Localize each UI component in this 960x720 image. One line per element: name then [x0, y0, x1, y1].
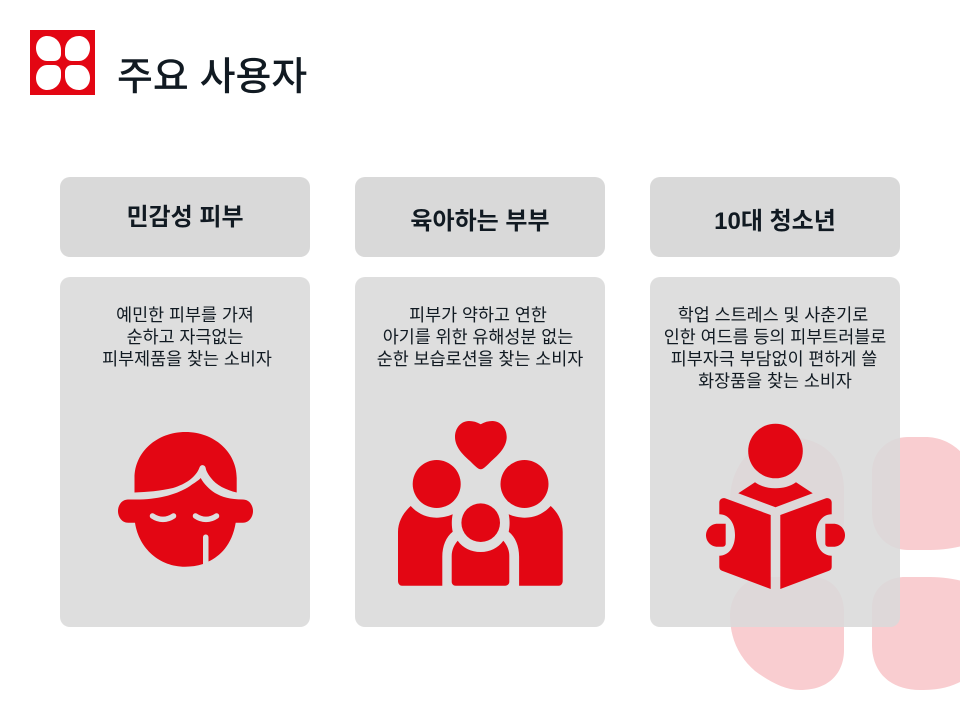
title: 주요 사용자 [117, 56, 307, 99]
panel header: 10대 청소년 [650, 177, 900, 257]
logo [30, 30, 95, 95]
panel: 10대 청소년 description [650, 277, 900, 627]
panel header: 민감성 피부: 민감성 피부 [126, 204, 244, 231]
panel: 육아하는 부부 description: 순한 보습로션을 찾는 소비자 [377, 349, 583, 369]
panel header: 육아하는 부부 [355, 177, 605, 257]
panel: 민감성 피부 description: 피부제품을 찾는 소비자 [102, 349, 272, 369]
panel: 10대 청소년 description: 화장품을 찾는 소비자 [698, 371, 852, 391]
panel header: 10대 청소년: 10대 청소년 [714, 208, 836, 235]
panel: 민감성 피부 description: 예민한 피부를 가져 [116, 305, 254, 325]
panel header: 육아하는 부부: 육아하는 부부 [410, 208, 550, 235]
panel: 10대 청소년 description: 인한 여드름 등의 피부트러블로 [664, 327, 886, 347]
panel: 민감성 피부 description: 순하고 자극없는 [127, 327, 243, 347]
panel: 육아하는 부부 description: 아기를 위한 유해성분 없는 [383, 327, 573, 347]
panel: 10대 청소년 description: 피부자극 부담없이 편하게 쓸 [671, 349, 877, 369]
panel: 육아하는 부부 description [355, 277, 605, 627]
panel: 민감성 피부 description [60, 277, 310, 627]
panel header: 민감성 피부 [60, 177, 310, 257]
panel: 10대 청소년 description: 학업 스트레스 및 사춘기로 [678, 305, 868, 325]
panel: 육아하는 부부 description: 피부가 약하고 연한 [409, 305, 547, 325]
